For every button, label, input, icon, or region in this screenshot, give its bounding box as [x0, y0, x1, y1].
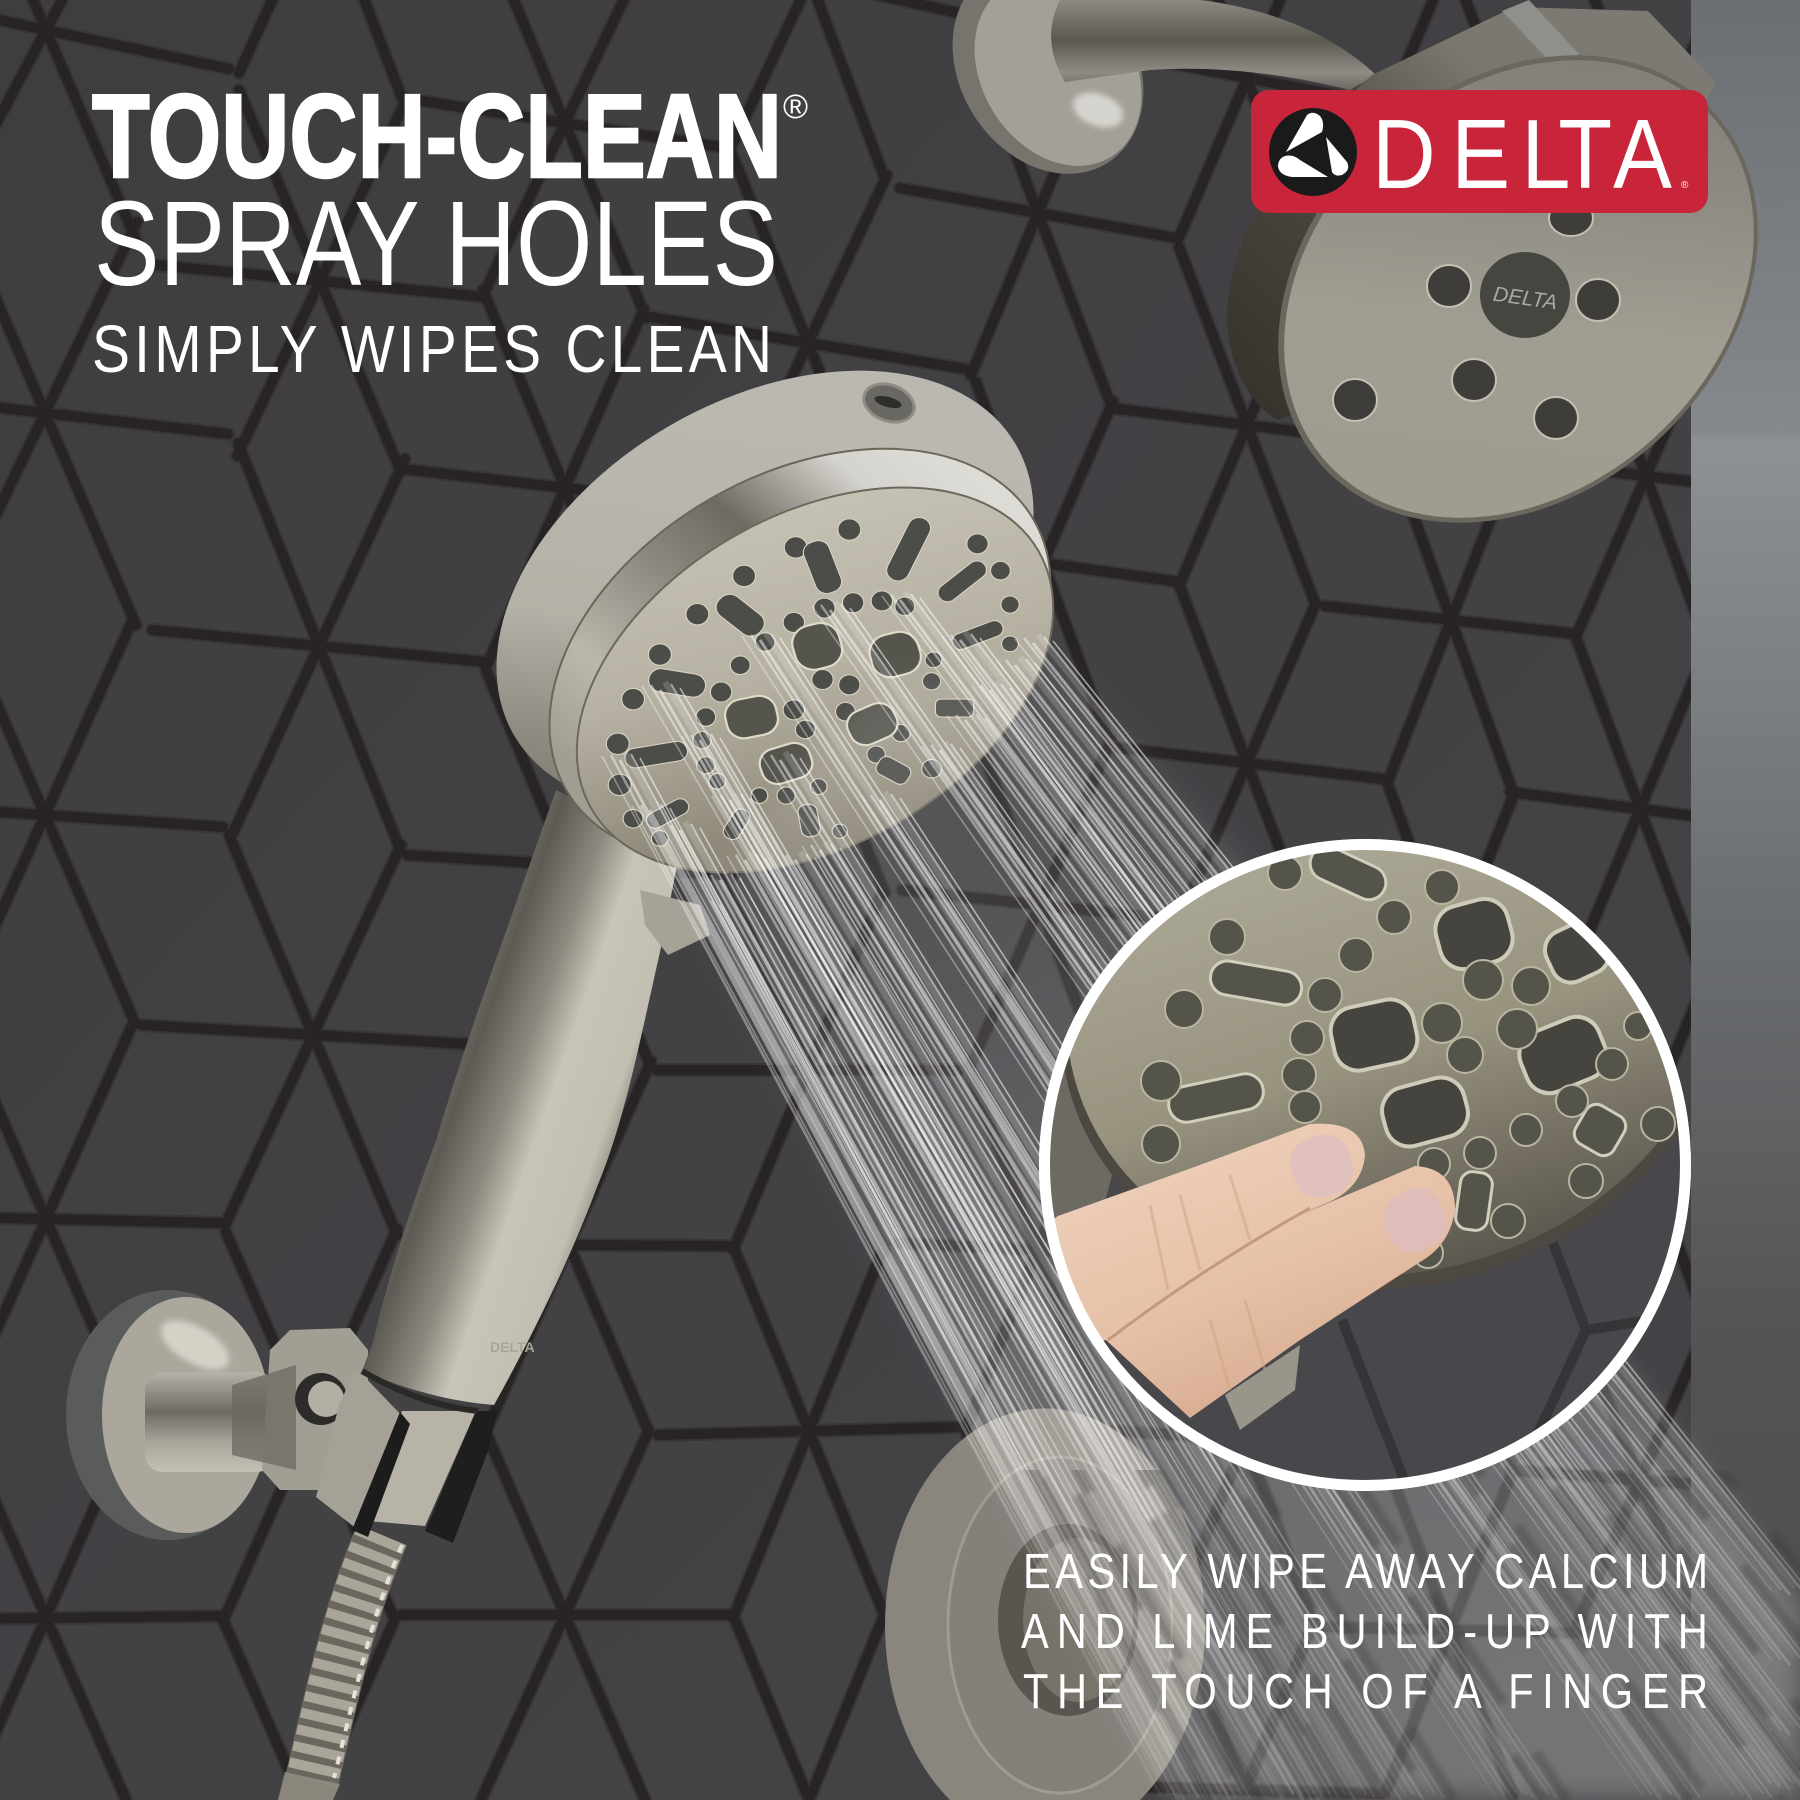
chart-like spray: water streams falling from the hand shower: [602, 592, 1800, 1800]
inset oblong nozzles: [1165, 841, 1630, 1232]
text block: benefit statement: [1021, 1544, 1708, 1719]
text: faint logo on handle: DELTA: [490, 1339, 535, 1355]
title: [92, 70, 808, 387]
icon: handle cradle clip: [316, 1368, 497, 1543]
icon: wall mount bracket: [66, 1290, 368, 1540]
callout: magnified finger wiping spray holes: [1039, 839, 1691, 1491]
icon: flexible metal hose: [278, 1535, 402, 1800]
text: registered mark: ®: [1681, 180, 1689, 191]
icon: Delta triangle mark: [1278, 113, 1348, 177]
inset small round nozzles: [1141, 856, 1675, 1268]
heading: TOUCH-CLEAN: TOUCH-CLEAN: [92, 70, 782, 203]
heading: SPRAY HOLES: SPRAY HOLES: [94, 175, 778, 311]
text block: benefit statement: THE TOUCH OF A FINGER: [1023, 1664, 1708, 1719]
spray nozzle holes: [606, 514, 1019, 846]
inset two fingers touching the holes: [1030, 1124, 1456, 1418]
subheading: simply wipes clean: SIMPLY WIPES CLEAN: [92, 313, 772, 387]
registered mark: ®: [783, 88, 808, 126]
icon: lower valve trim plate: [885, 1408, 1205, 1800]
logo: Delta badge: [1251, 90, 1708, 213]
text: DELTA wordmark: DELTA: [1372, 100, 1672, 209]
icon: overhead shower arm and flange: [914, 0, 1376, 210]
icon: hand shower handle: [362, 790, 710, 1405]
icon: hand shower head with spray face: [419, 280, 1124, 952]
icon: overhead round shower head: [1184, 0, 1800, 619]
text block: benefit statement: AND LIME BUILD-UP WITH: [1021, 1604, 1708, 1659]
text: small logo on shower face: DELTA: [1492, 283, 1559, 314]
text block: benefit statement: EASILY WIPE AWAY CALCIUM: [1023, 1544, 1708, 1599]
inset big pillow nozzles: [1326, 894, 1616, 1152]
